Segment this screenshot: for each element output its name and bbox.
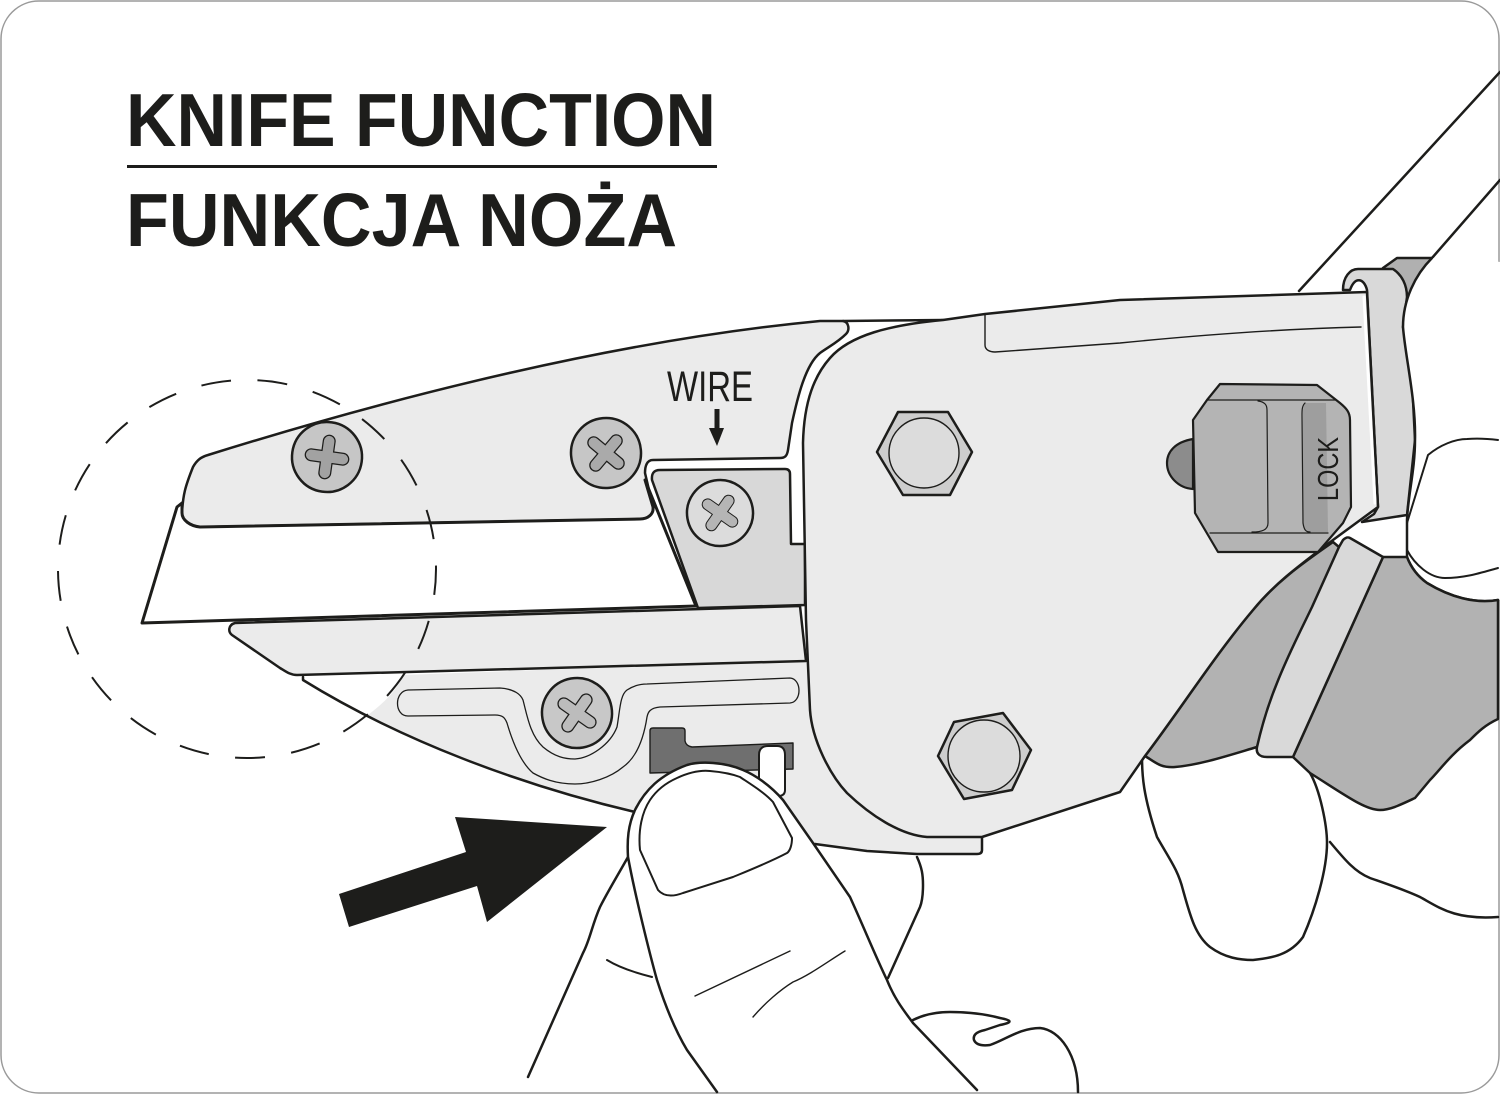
lock button [1167, 384, 1351, 552]
title: english: KNIFE FUNCTION [126, 78, 716, 162]
lower jaw [229, 606, 982, 854]
tool rear arms [1299, 72, 1500, 291]
finger crease [607, 960, 652, 977]
lock text: LOCK [1313, 436, 1345, 501]
finger: upper right fill [1403, 258, 1500, 601]
screw 3 [674, 467, 766, 559]
wire label [667, 363, 753, 446]
thumb nail [639, 771, 792, 896]
slider window [759, 746, 785, 796]
upper body highlight [985, 315, 1361, 352]
body right edge highlight [1364, 297, 1375, 503]
nut top [877, 412, 972, 495]
upper blade holder [182, 321, 848, 527]
slider body [650, 728, 793, 773]
slider switch [650, 728, 793, 796]
screw 1 [287, 417, 367, 497]
nut bottom [938, 713, 1031, 799]
big arrow [339, 817, 607, 927]
finger: top knuckle [1407, 439, 1498, 523]
lock nub [1167, 439, 1193, 489]
dashed circle [58, 380, 436, 758]
wire slot plate [652, 469, 805, 608]
wire text: WIRE [667, 363, 753, 411]
palm edge [888, 857, 923, 978]
back finger [528, 857, 628, 1077]
thumb outline [628, 763, 977, 1092]
finger: lower [1142, 757, 1327, 960]
jaw slot outline [398, 678, 799, 784]
grip left part [1145, 542, 1339, 767]
jaw plate outline [303, 677, 982, 854]
tool body [803, 292, 1378, 837]
lock grooves [1208, 400, 1335, 533]
thumb [628, 763, 977, 1092]
screw 4 [528, 664, 626, 762]
rear collar dark [1383, 258, 1432, 297]
thumb creases [695, 951, 845, 1017]
holder top extension [843, 320, 943, 321]
lock dark strip [1303, 403, 1328, 532]
rear collar [1343, 269, 1415, 522]
lock housing [1193, 384, 1351, 552]
screw 2 [557, 404, 655, 502]
finger: far right [1330, 842, 1498, 917]
title: polish: FUNKCJA NOŻA [126, 178, 677, 262]
finger: upper right outline [1403, 258, 1498, 601]
grip right part [1293, 557, 1498, 810]
title block [126, 78, 717, 262]
right fingers [1142, 258, 1500, 960]
finger: crease [1407, 550, 1498, 578]
grip band [1257, 537, 1383, 757]
palm behind thumb [528, 763, 1078, 1092]
jaw upper band [229, 606, 806, 675]
palm lower line [913, 1012, 1078, 1092]
blade [142, 480, 696, 623]
handle grip [1145, 537, 1498, 810]
wire arrow [709, 409, 724, 446]
jaw plate shade [368, 660, 982, 854]
